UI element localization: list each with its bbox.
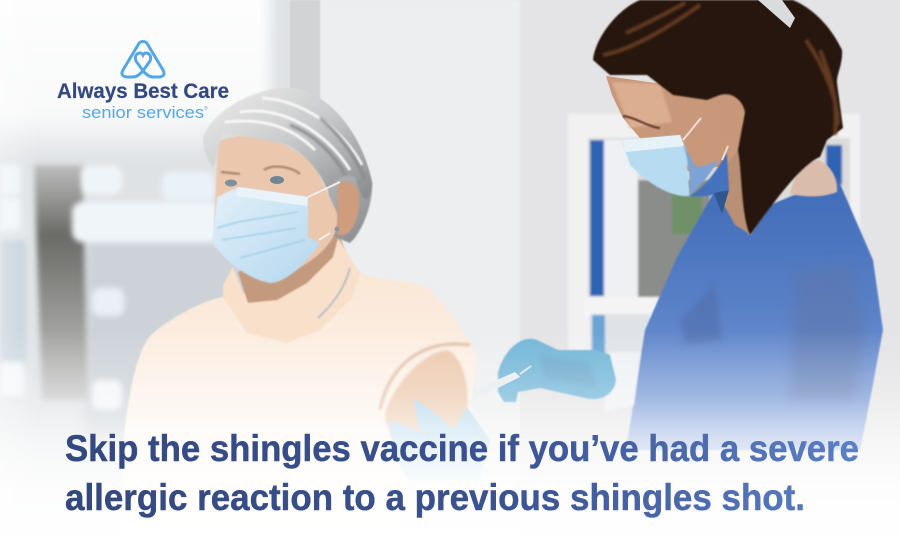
blurred window: dark column	[34, 165, 88, 400]
syringe	[451, 366, 531, 405]
nurse scrubs	[626, 177, 883, 450]
scrub folds	[790, 262, 866, 400]
hair strands	[225, 98, 362, 170]
white bottom fade	[0, 330, 900, 550]
logo tagline: senior services	[82, 103, 204, 122]
white top-left fade behind logo	[0, 0, 270, 160]
sleeve fold	[380, 344, 470, 410]
nurse face	[606, 76, 750, 172]
supporting glove on arm	[390, 398, 490, 480]
nurse eye	[623, 116, 660, 128]
senior woman figure	[122, 88, 490, 550]
bare upper arm	[385, 350, 468, 470]
headline line 2: allergic reaction to a previous shingles shot.	[65, 477, 805, 518]
face	[214, 136, 338, 272]
nurse sleeve	[604, 352, 640, 412]
nurse mask	[622, 118, 729, 196]
ear	[337, 182, 359, 235]
white left-edge fade	[0, 0, 40, 550]
logo wordmark: Always Best Care	[57, 80, 229, 103]
sweater torso	[122, 273, 477, 550]
nurse neck	[712, 110, 752, 235]
nurse hair highlights	[603, 3, 838, 135]
turtleneck collar	[223, 238, 360, 343]
headline	[65, 428, 859, 518]
eyes	[221, 167, 300, 174]
hair back	[203, 88, 372, 243]
blurred window: left pane	[0, 240, 26, 370]
scrubs v-neck	[714, 190, 729, 214]
collar shadow	[318, 268, 350, 318]
registered mark: ®	[204, 105, 208, 112]
blurred window: grey floor tone	[86, 242, 244, 426]
logo	[57, 42, 229, 122]
logo icon: house with heart	[122, 42, 164, 77]
nurse ear	[718, 97, 743, 138]
nurse hair	[593, 0, 843, 235]
blurred window: highlights	[72, 202, 220, 242]
neck	[238, 225, 345, 310]
background shelf with binders	[568, 114, 860, 364]
mask	[212, 182, 340, 283]
hair front	[203, 88, 372, 199]
hair clip	[758, 0, 795, 28]
nurse shoulder skin	[790, 160, 837, 196]
gloved hand holding syringe	[498, 339, 616, 402]
nurse figure	[451, 0, 883, 450]
headline line 1: Skip the shingles vaccine if you’ve had a severe	[65, 428, 859, 469]
